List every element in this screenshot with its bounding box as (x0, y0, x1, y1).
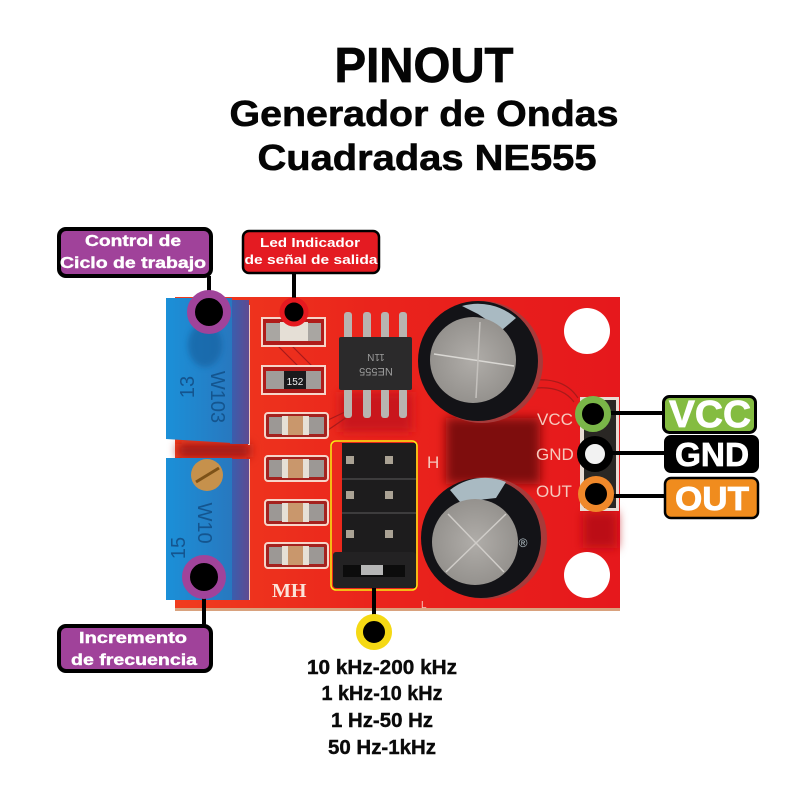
NE555 chip (339, 312, 412, 418)
label: GND: GND (675, 436, 749, 473)
label: OUT: OUT (675, 480, 749, 517)
connector: duty cycle (207, 276, 211, 312)
silkscreen labels: OUT (536, 482, 572, 501)
connector: GND (595, 451, 666, 455)
MH logo: MH (272, 580, 307, 602)
jumper highlight outline (331, 441, 417, 590)
marker: duty cycle (191, 294, 227, 330)
silkscreen labels: GND (536, 445, 574, 464)
resistor 152: 152 (287, 377, 304, 388)
label: frequency increment (59, 626, 211, 671)
label: duty cycle: Ciclo de trabajo (60, 255, 206, 272)
silkscreen labels: L (421, 600, 427, 611)
top potentiometer: W103 (206, 371, 228, 423)
connector: frequency increment (202, 577, 206, 626)
frequency ranges list: 50 Hz-1kHz (328, 737, 436, 759)
bottom potentiometer (166, 458, 250, 600)
module board photo (166, 297, 620, 611)
silkscreen labels: H (427, 453, 439, 472)
marker: frequency increment (186, 559, 222, 595)
LED (262, 318, 325, 346)
label: duty cycle (59, 229, 211, 276)
board shadows (178, 392, 617, 548)
bottom potentiometer: W10 (193, 502, 215, 544)
subtitle: Generador de Ondas (230, 93, 618, 134)
top potentiometer: 13 (177, 376, 199, 398)
label: OUT (665, 478, 758, 518)
silkscreen labels (421, 410, 574, 611)
silkscreen labels: VCC (537, 410, 573, 429)
NE555 chip: NE555 (359, 365, 393, 377)
connector: VCC (593, 411, 664, 415)
frequency ranges list: 10 kHz-200 kHz (307, 657, 457, 679)
circuit traces (278, 346, 578, 430)
subtitle: Cuadradas NE555 (258, 137, 596, 178)
bottom electrolytic capacitor (421, 477, 547, 599)
label: duty cycle: Control de (85, 233, 181, 250)
mounting hole top (564, 308, 610, 354)
connector: OUT (596, 494, 666, 498)
marker: OUT (582, 480, 610, 508)
label: led: Led Indicador (260, 236, 360, 250)
mounting hole bottom (564, 552, 610, 598)
connector: jumper (372, 588, 376, 632)
bottom potentiometer: 15 (168, 537, 190, 559)
marker: jumper (360, 618, 388, 646)
frequency ranges list: 1 kHz-10 kHz (322, 683, 442, 705)
pin header (580, 397, 619, 511)
title: PINOUT (334, 39, 514, 93)
marker: GND (581, 440, 609, 468)
label: VCC: VCC (669, 394, 751, 436)
label: led (243, 231, 379, 273)
capacitors (265, 413, 328, 568)
bottom electrolytic capacitor: ® (519, 536, 528, 550)
marker: led (282, 300, 306, 324)
marker: VCC (578, 400, 608, 428)
top potentiometer (166, 298, 250, 445)
jumper block (333, 443, 416, 588)
label: led: de señal de salida (244, 253, 379, 267)
subtitle (230, 93, 618, 178)
label: frequency increment: Incremento (79, 630, 187, 647)
frequency ranges list: 1 Hz-50 Hz (331, 710, 433, 732)
resistor 152 (262, 366, 325, 394)
top electrolytic capacitor (418, 301, 543, 423)
red circuit board (175, 297, 620, 611)
frequency ranges list (307, 657, 457, 759)
NE555 chip: 11N (367, 351, 385, 362)
label: frequency increment: de frecuencia (71, 652, 197, 669)
connector: led (292, 272, 296, 312)
